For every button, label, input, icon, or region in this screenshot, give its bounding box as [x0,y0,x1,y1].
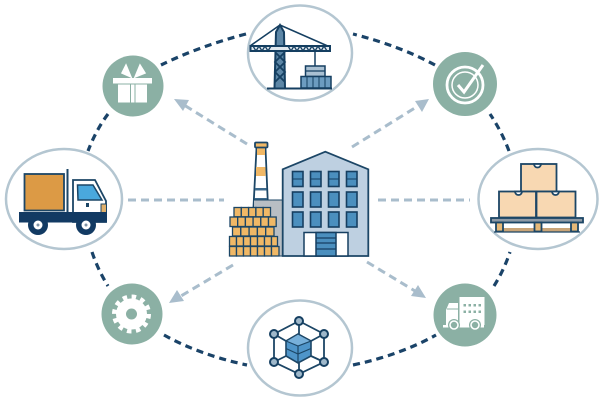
door [304,232,348,256]
line: right [378,198,470,202]
icon: network cube in circle [248,300,352,396]
chimney [254,142,268,207]
central factory [230,142,368,256]
icon: gift in circle [102,56,164,116]
icon: gear in circle [102,284,162,344]
icon: pallet boxes in circle [478,149,598,249]
icon: box truck in circle [434,284,496,346]
building [283,152,368,256]
arrow: lower left [169,265,233,303]
arrow: upper right [352,99,429,147]
icon: checkmark in circle [433,52,497,116]
arrows from factory [128,99,470,303]
dashed ring [88,34,510,365]
arrow: lower right [367,262,426,298]
icon: delivery truck in circle [6,149,122,249]
crates [230,208,279,256]
annex [254,200,284,256]
line: left [128,198,224,202]
windows [292,172,357,227]
arrow: upper left [174,99,247,144]
icon: crane in circle [248,6,352,100]
